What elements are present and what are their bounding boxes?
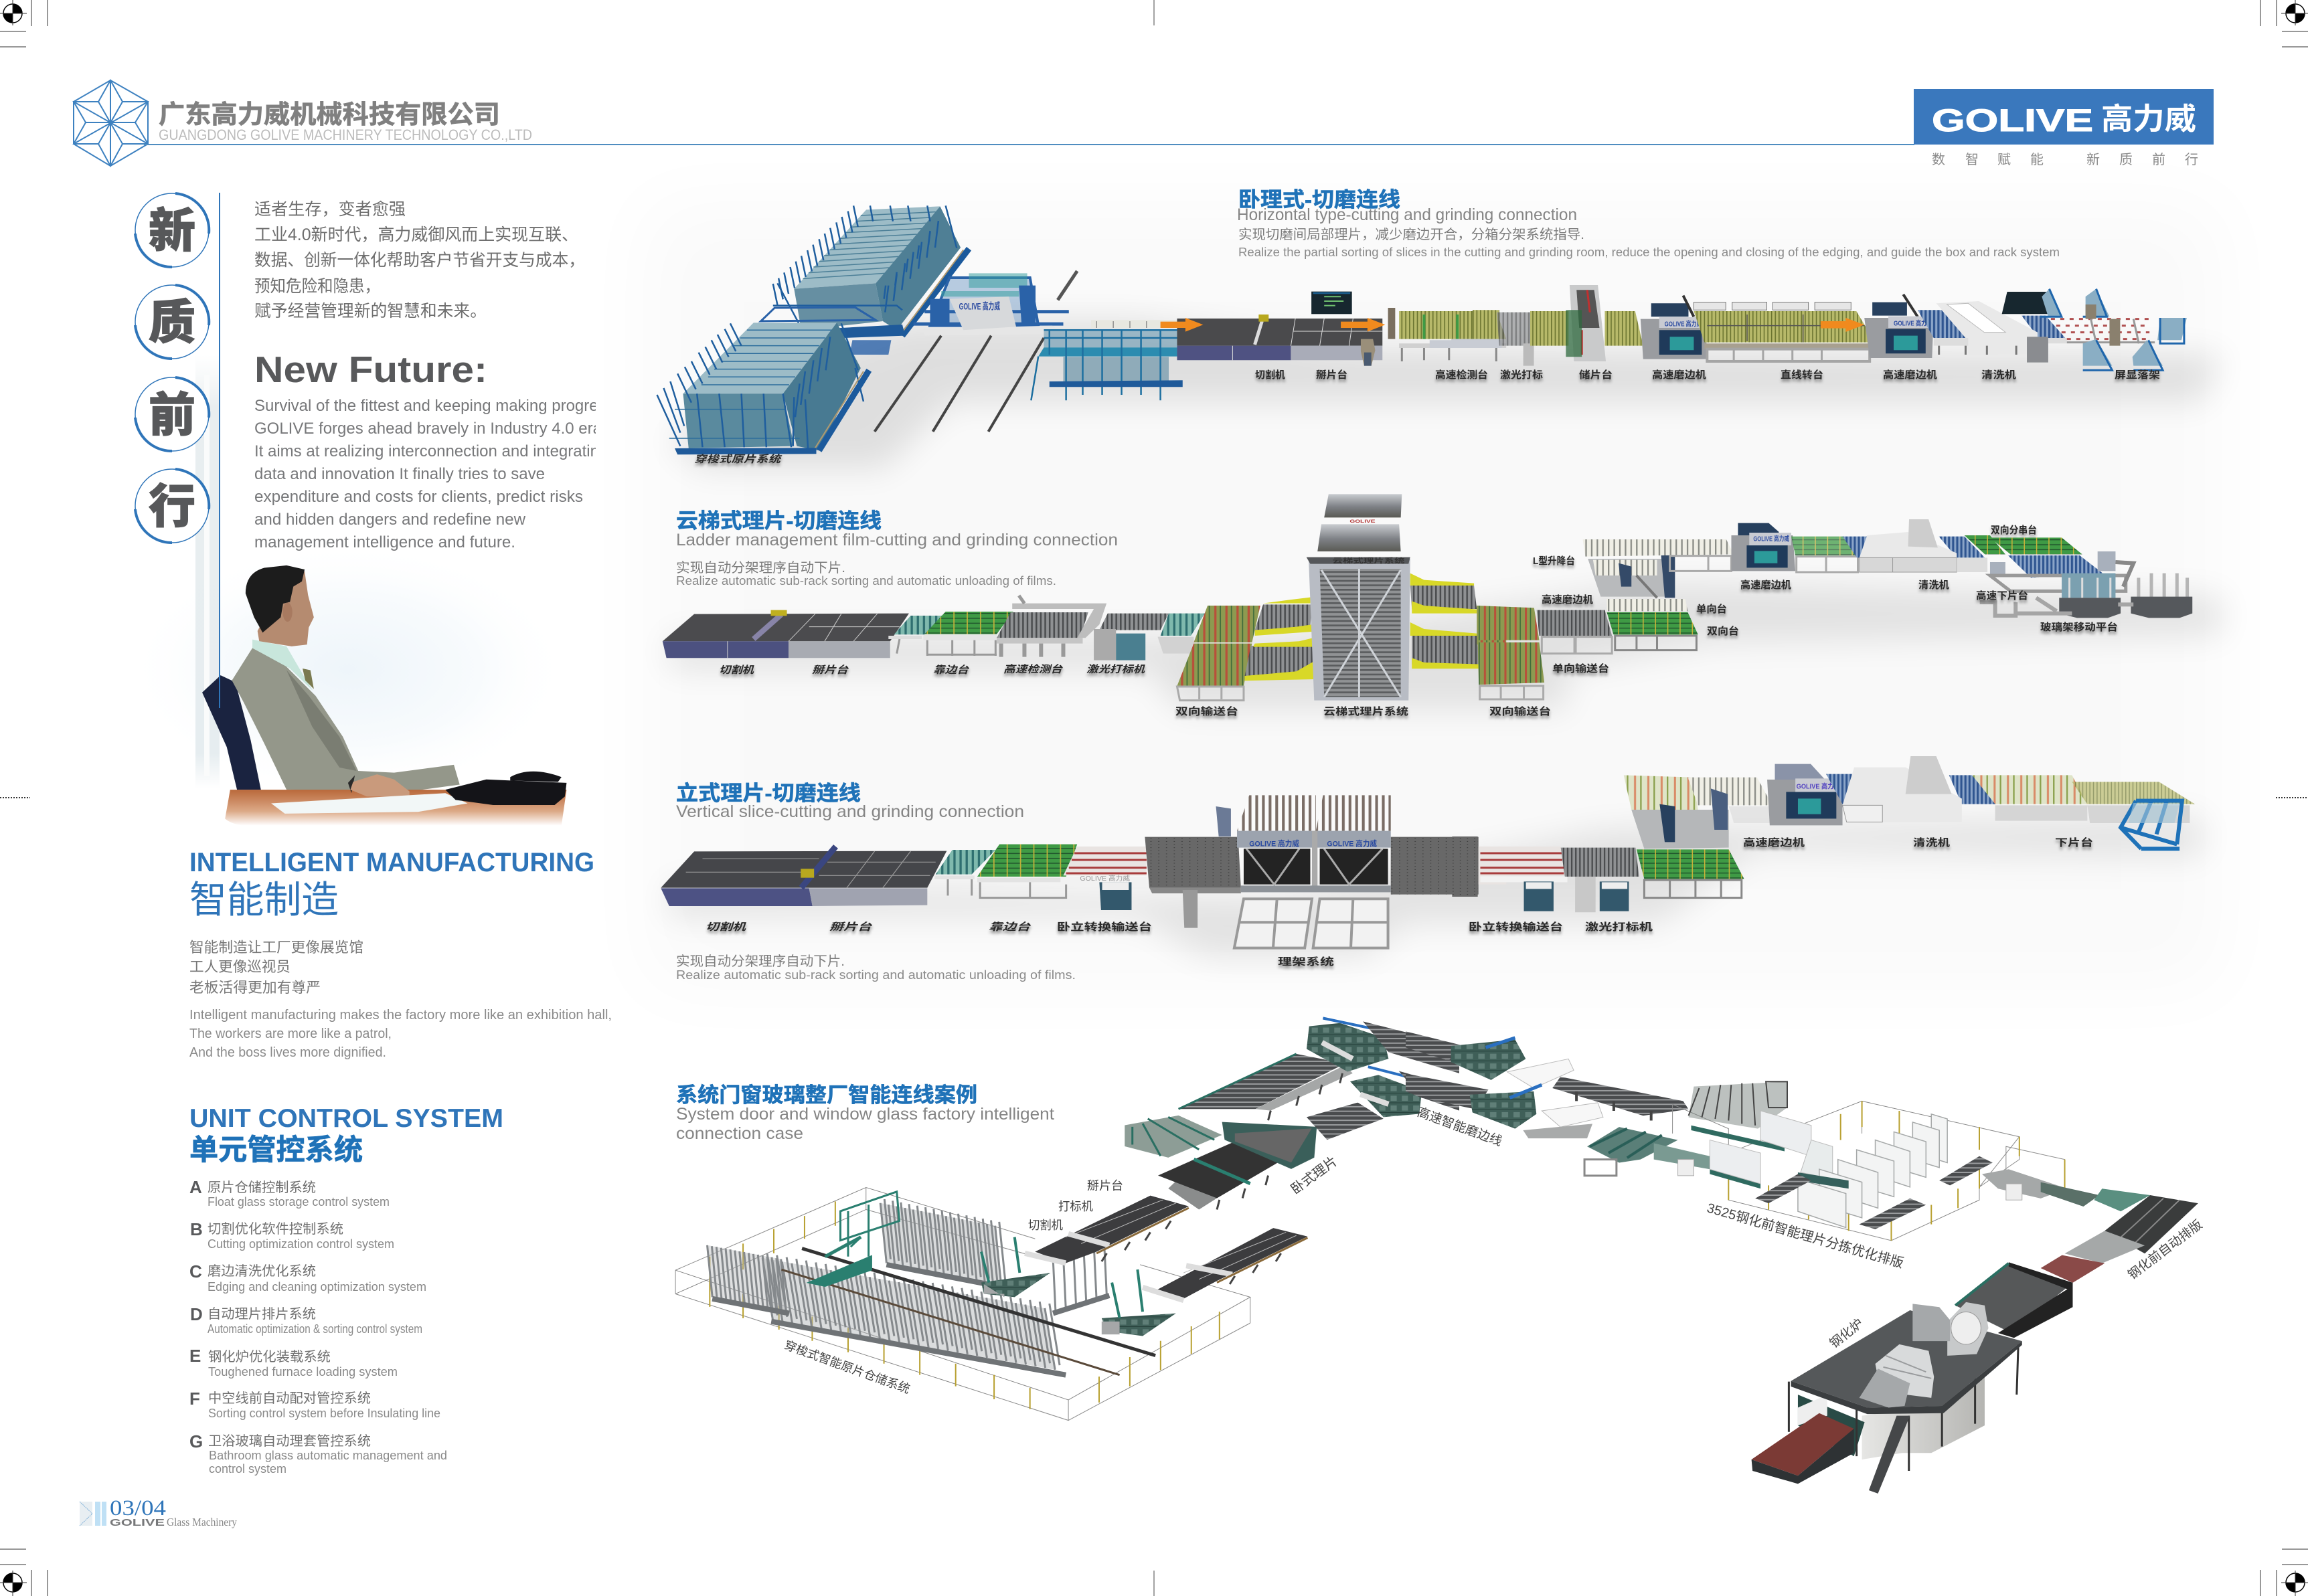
intro text English: and hidden dangers and redefine new	[254, 511, 526, 529]
blue unloading rack	[2121, 801, 2182, 849]
item A: 原片仓储控制系统	[208, 1180, 316, 1195]
badge 质: 质	[149, 296, 195, 349]
item F	[189, 1389, 440, 1420]
line 1 labels: 高速磨边机	[1652, 369, 1706, 381]
small teal rack	[1031, 320, 1183, 400]
line 1 machinery right part: GOLIVE 高力威	[1894, 319, 1932, 327]
icon: chevron and bars	[80, 1502, 106, 1526]
factory layout labels: 钢化前自动排版	[2125, 1217, 2205, 1283]
heading Chinese: 单元管控系统	[189, 1134, 363, 1166]
ladder sorting tower: 云梯式理片系统	[1333, 557, 1404, 565]
edge grinding machines	[1307, 1018, 1459, 1140]
right conveyor fragment	[1479, 847, 1506, 885]
item B: 切割优化软件控制系统	[208, 1221, 343, 1237]
page number: 03/04	[110, 1496, 166, 1520]
line 1 labels: 清洗机	[1981, 369, 2016, 381]
badge 前	[135, 377, 209, 451]
item G: G	[189, 1431, 203, 1451]
line 2 labels: 切割机	[719, 664, 754, 676]
line 3 heading block: 立式理片-切磨连线	[676, 782, 861, 805]
cutting table	[661, 847, 946, 906]
line 3 heading block: Vertical slice-cutting and grinding connection	[676, 802, 1024, 821]
line 1 heading block	[1237, 188, 2060, 259]
right conveyor fragment	[1477, 608, 1506, 684]
badge 新	[135, 193, 209, 267]
line 3 heading block: 实现自动分架理序自动下片.	[676, 954, 845, 969]
company name English: GUANGDONG GOLIVE MACHINERY TECHNOLOGY CO.,LTD	[159, 126, 532, 143]
sorting station fences	[1673, 1101, 2065, 1241]
line 3 machinery left part: GOLIVE 高力威	[1327, 839, 1377, 848]
brand badge: GOLIVE	[1932, 102, 2093, 138]
heading Chinese: 智能制造	[189, 879, 339, 921]
blower fans	[1860, 1302, 1989, 1407]
line 2 labels: 玻璃架移动平台	[2040, 621, 2118, 633]
line 2 labels: 靠边台	[933, 664, 969, 676]
factory layout labels: 穿梭式智能原片仓储系统	[782, 1338, 912, 1396]
factory case heading block	[676, 1083, 1054, 1143]
line 1 labels: 屏显落架	[2115, 369, 2160, 381]
tempering furnace body	[1752, 1262, 2072, 1484]
grinder head	[1767, 764, 1843, 825]
icon: hexagon star logo	[74, 80, 148, 166]
item B: B	[190, 1219, 203, 1239]
aligning tables: GOLIVE 高力威	[1080, 875, 1130, 883]
badge 行: 行	[149, 480, 195, 533]
item A	[189, 1177, 390, 1209]
monitor	[2002, 292, 2049, 314]
badge 前: 前	[149, 389, 195, 441]
intro text English: GOLIVE forges ahead bravely in Industry 4.0 era.	[254, 420, 606, 438]
line 1 labels: 高速检测台	[1435, 369, 1488, 381]
badge 行	[135, 469, 209, 543]
line 2 labels: 高速下片台	[1976, 590, 2028, 602]
section: unit control system	[189, 1104, 503, 1476]
tilt tables	[981, 1237, 1176, 1336]
edge grinder two	[1864, 294, 1935, 358]
inspection table	[1399, 311, 1506, 361]
line 2 heading block	[676, 509, 1118, 588]
sorting racks	[1183, 795, 1391, 928]
factory layout labels	[782, 1105, 2205, 1396]
page number footer	[80, 1496, 237, 1528]
line 2 labels: 掰片台	[812, 664, 849, 676]
line 2 machinery right part	[1477, 519, 2192, 699]
item F: 中空线前自动配对管控系统	[208, 1391, 371, 1406]
ladder sorting tower: GOLIVE	[1349, 519, 1375, 524]
line 2 labels: L型升降台	[1533, 555, 1575, 567]
output conveyors	[1982, 1169, 2198, 1283]
intro text Chinese	[254, 200, 585, 321]
line 2 labels: 双向分串台	[1991, 524, 2037, 536]
body English	[189, 1008, 612, 1060]
line 3 labels: 切割机	[706, 921, 746, 933]
line 1 labels: 切割机	[1255, 369, 1285, 381]
line 1 heading block: Horizontal type-cutting and grinding connection	[1237, 205, 1577, 224]
footer caption: Glass Machinery	[167, 1516, 237, 1528]
factory layout labels: 掰片台	[1087, 1179, 1123, 1192]
intro text English	[254, 397, 614, 551]
line 2 labels: 清洗机	[1918, 579, 1949, 591]
line 1 heading block: Realize the partial sorting of slices in the cutting and grinding room, reduce the opening and closing of the edging, and guide the box and rack system	[1238, 246, 2060, 259]
intro text Chinese: 预知危险和隐患，	[254, 277, 380, 296]
line 1 heading block: 卧理式-切磨连线	[1238, 188, 1400, 211]
factory layout labels: 高速智能磨边线	[1415, 1105, 1504, 1149]
storage fence	[675, 1188, 1250, 1421]
washer and output	[1826, 756, 2195, 823]
laser and stacking tower	[1451, 285, 1643, 366]
line 3 labels: 卧立转换输送台	[1469, 921, 1563, 933]
body English: Intelligent manufacturing makes the factory more like an exhibition hall,	[189, 1008, 612, 1023]
suit	[232, 648, 460, 792]
item C: 磨边清洗优化系统	[208, 1263, 316, 1279]
turnover and laser units	[1452, 836, 1639, 912]
double tables	[1607, 599, 1698, 650]
L-shape grinder	[1583, 539, 1734, 598]
line 3 machinery left part	[661, 795, 1506, 948]
cutting table	[663, 610, 909, 658]
factory layout labels: 3525钢化前智能理片分拣优化排版	[1705, 1200, 1905, 1271]
line 3 labels: 理架系统	[1278, 956, 1334, 968]
yellow ladder conveyors	[1245, 573, 1481, 681]
line 1 machinery right part: GOLIVE 高力威	[1665, 320, 1702, 327]
inspection table	[997, 596, 1106, 657]
header rule	[144, 144, 1914, 145]
brand badge	[1914, 89, 2214, 145]
unloading racks and worker figures	[2040, 289, 2187, 370]
item E: Toughened furnace loading system	[208, 1365, 398, 1379]
body Chinese: 工人更像巡视员	[189, 959, 291, 975]
line 3 machinery right part: GOLIVE 高力威	[1797, 782, 1840, 790]
line 2 labels: 双向输送台	[1489, 705, 1551, 717]
roller and aligning table	[888, 612, 1013, 656]
item D: 自动理片排片系统	[208, 1306, 316, 1322]
heading English: INTELLIGENT MANUFACTURING	[189, 848, 594, 877]
green shuttle gantry	[810, 1192, 900, 1285]
item E: 钢化炉优化装载系统	[208, 1349, 331, 1364]
lower glass rack	[657, 323, 869, 454]
soft background shadows behind machinery	[643, 201, 2222, 990]
item C: Edging and cleaning optimization system	[208, 1280, 426, 1294]
green table	[1637, 849, 1744, 898]
factory layout labels: 打标机	[1058, 1200, 1093, 1213]
body English: The workers are more like a patrol,	[189, 1027, 392, 1041]
line 3 labels: 清洗机	[1913, 836, 1950, 849]
item G	[189, 1431, 447, 1476]
body Chinese: 智能制造让工厂更像展览馆	[189, 940, 363, 956]
laser marking unit	[1094, 614, 1205, 660]
section: intelligent manufacturing	[189, 848, 612, 1060]
four circled characters	[135, 193, 209, 543]
sorting racks: GOLIVE 高力威	[1249, 839, 1299, 848]
line 2 machinery right part: GOLIVE 高力威	[1753, 535, 1789, 543]
line 1 labels: 储片台	[1579, 369, 1613, 381]
worker figures	[1361, 308, 1395, 366]
grinder head	[1731, 523, 1795, 571]
photo background glow	[127, 542, 569, 796]
photo: businessman at desk	[202, 565, 566, 826]
glass storage racks	[708, 1199, 1155, 1375]
header: company logo and name	[74, 80, 532, 166]
item F: Sorting control system before Insulating line	[208, 1407, 440, 1420]
line 2 labels: 高速磨边机	[1542, 594, 1593, 606]
upper glass rack	[761, 205, 969, 355]
line 1 labels: 直线转台	[1781, 369, 1823, 381]
line 1 labels: 掰片台	[1316, 369, 1347, 381]
company name Chinese: 广东高力威机械科技有限公司	[159, 101, 500, 129]
factory layout labels: 钢化炉	[1827, 1316, 1866, 1351]
line 1 machinery right part	[1451, 285, 2187, 370]
line 3 labels: 下片台	[2055, 836, 2093, 849]
head	[258, 571, 314, 646]
line 2 labels: 激光打标机	[1086, 664, 1145, 675]
line 1 machinery left part	[657, 205, 1506, 454]
factory layout labels: 切割机	[1028, 1219, 1063, 1232]
bidirectional conveyors	[1477, 606, 1544, 699]
horizontal sorting tables	[1125, 1054, 1353, 1209]
intro text English: Survival of the fittest and keeping making progress	[254, 397, 614, 415]
line 2 labels: 高速检测台	[1003, 664, 1063, 675]
item G: control system	[209, 1462, 286, 1476]
flip panels	[1145, 837, 1479, 895]
bidirectional conveyors	[1177, 606, 1260, 701]
badge 新: 新	[149, 205, 195, 257]
intro text Chinese: 赋予经营管理新的智慧和未来。	[254, 302, 487, 321]
line 3 labels: 激光打标机	[1585, 921, 1653, 933]
intro text English: It aims at realizing interconnection and integrating	[254, 442, 608, 460]
footer brand: GOLIVE	[110, 1517, 165, 1528]
center transfer station	[875, 271, 1077, 432]
line 3 labels: 卧立转换输送台	[1057, 921, 1152, 933]
grinding lines	[1406, 1031, 1710, 1176]
line 2 labels	[719, 524, 2118, 717]
edge grinder one	[1641, 296, 1707, 359]
intro text English: expenditure and costs for clients, predict risks	[254, 488, 583, 506]
line 3 machinery right part	[1452, 756, 2195, 912]
unloader	[1980, 537, 2192, 618]
factory layout right part	[1406, 1031, 2198, 1494]
rollers and washer	[1791, 519, 2005, 572]
chair	[202, 675, 261, 790]
rack frames	[1234, 899, 1388, 948]
intro text Chinese: 数据、创新一体化帮助客户节省开支与成本，	[254, 251, 585, 270]
line 2 heading block: Ladder management film-cutting and grinding connection	[676, 531, 1118, 549]
intro text English: data and innovation It finally tries to save	[254, 465, 545, 483]
vertical blue rule	[219, 193, 220, 708]
item C: C	[189, 1261, 202, 1281]
line 3 heading block: Realize automatic sub-rack sorting and automatic unloading of films.	[676, 968, 1076, 982]
line 2 heading block: 云梯式理片-切磨连线	[676, 509, 882, 533]
factory layout left part	[675, 1018, 1459, 1421]
item A: Float glass storage control system	[208, 1195, 390, 1209]
line 2 labels: 单向台	[1696, 603, 1727, 615]
line 3 labels: 掰片台	[829, 921, 872, 933]
cutting tables	[1025, 1196, 1307, 1300]
window column behind the vertical rule	[195, 355, 220, 788]
item A: A	[189, 1177, 202, 1197]
line 1 labels: 高速磨边机	[1883, 369, 1937, 381]
item E	[189, 1346, 398, 1379]
line 3 labels	[706, 836, 2093, 968]
body Chinese: 老板活得更加有尊严	[189, 980, 321, 996]
line 2 heading block: Realize automatic sub-rack sorting and automatic unloading of films.	[676, 574, 1056, 588]
vertical storage racks	[1689, 1081, 1993, 1229]
item F: F	[189, 1389, 200, 1409]
line 3 labels: 高速磨边机	[1743, 836, 1805, 849]
transfer table with yellow rollers	[1694, 302, 1875, 361]
line 2 labels: 云梯式理片系统	[1323, 705, 1408, 717]
line 2 heading block: 实现自动分架理序自动下片.	[676, 560, 845, 575]
icon: orange arrow	[1821, 318, 1864, 332]
intro text Chinese: 适者生存，变者愈强	[254, 200, 406, 219]
body Chinese	[189, 940, 363, 996]
icon: orange flow arrows	[1161, 318, 1385, 332]
item D: D	[190, 1304, 203, 1324]
factory case heading block: 系统门窗玻璃整厂智能连线案例	[676, 1083, 977, 1107]
cutting table	[1177, 315, 1382, 360]
item E: E	[189, 1346, 201, 1366]
slogan: 数智赋能新质前行	[1932, 152, 2198, 167]
item D: Automatic optimization & sorting control system	[208, 1322, 422, 1336]
line 1 heading block: 实现切磨间局部理片，减少磨边开合，分箱分架系统指导.	[1238, 227, 1584, 242]
brand badge: 高力威	[2101, 102, 2196, 136]
intro text Chinese: 工业4.0新时代，高力威御风而上实现互联、	[254, 226, 578, 244]
item C	[189, 1261, 426, 1294]
ladder sorting tower	[1307, 494, 1410, 701]
factory case heading block: connection case	[676, 1124, 803, 1143]
item D	[190, 1304, 422, 1336]
factory case heading block: System door and window glass factory intelligent	[676, 1105, 1054, 1124]
item G: 卫浴玻璃自动理套管控系统	[208, 1433, 371, 1449]
line 2 machinery left part	[663, 494, 1506, 701]
item G: Bathroom glass automatic management and	[209, 1449, 447, 1462]
body English: And the boss lives more dignified.	[189, 1045, 386, 1060]
heading English: UNIT CONTROL SYSTEM	[189, 1104, 503, 1133]
line 3 labels: 靠边台	[989, 921, 1031, 933]
center transfer station: GOLIVE 高力威	[959, 301, 1000, 311]
item B: Cutting optimization control system	[208, 1237, 394, 1251]
badge 质	[135, 285, 209, 359]
L-shape grinder	[1624, 775, 1773, 849]
line 2 labels: 高速磨边机	[1740, 579, 1791, 591]
monitor	[1311, 292, 1352, 314]
line 2 labels: 双向台	[1707, 625, 1739, 637]
washer	[1918, 301, 2067, 363]
line 2 labels: 双向输送台	[1175, 705, 1238, 717]
aligning tables	[934, 845, 1147, 910]
line 2 labels: 单向输送台	[1552, 662, 1609, 675]
line 1 labels: 穿梭式原片系统	[694, 454, 783, 465]
item B	[190, 1219, 394, 1251]
intro text English: management intelligence and future.	[254, 533, 515, 551]
telephone	[445, 780, 566, 805]
line 1 labels: 激光打标	[1500, 369, 1543, 381]
factory layout labels: 卧式理片	[1288, 1154, 1340, 1197]
steel platform	[1789, 1310, 2022, 1494]
heading: New Future: New Future:	[254, 349, 487, 390]
line 1 labels	[694, 369, 2160, 465]
desk	[225, 790, 566, 826]
line 3 heading block	[676, 782, 1076, 982]
single conveyor	[1537, 610, 1612, 654]
